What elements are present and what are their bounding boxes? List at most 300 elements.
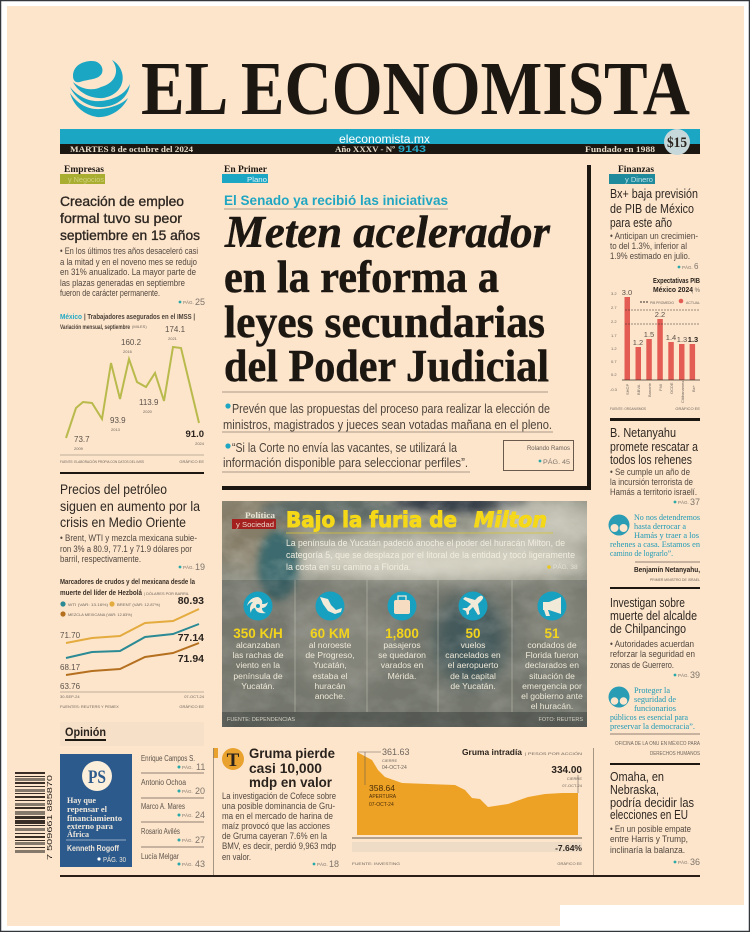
bar chart: expectativas PIB: FUENTE: ORGANISMOS [610, 406, 646, 411]
line chart: trabajadores asegurados: 2009 [74, 446, 84, 451]
page ref [674, 857, 700, 867]
area chart: Gruma intradía: 07-OCT-24 [369, 802, 394, 808]
opinión heading: Opinión [65, 727, 106, 739]
line chart: trabajadores asegurados: Variación mensual, septiembre [60, 324, 130, 331]
story: Omaha [610, 770, 700, 867]
stat: pasajeros: pasajeros [383, 640, 421, 650]
area chart: Gruma intradía [352, 747, 583, 866]
date bar: 9143 [398, 144, 426, 154]
byline box [504, 440, 574, 470]
headline: siguen en aumento por la [60, 498, 200, 514]
panel title [286, 508, 553, 533]
stat: distancia: Yucatán, [313, 660, 347, 670]
stat: condados: 51 [544, 626, 560, 641]
body: 1.9% estimado en julio. [610, 251, 690, 261]
bar chart: expectativas PIB: | % [691, 288, 701, 294]
columnist list: PÁG. [182, 812, 193, 818]
headline [610, 426, 698, 467]
headline: promete rescatar a [610, 440, 698, 454]
pull quote [608, 512, 701, 558]
bar chart: expectativas PIB: 2.2 [655, 310, 665, 319]
page ref: PÁG. [317, 861, 328, 867]
page ref: PÁG. [678, 499, 689, 505]
featured column: Hay que [67, 796, 96, 805]
pull quote: Proteger la [634, 685, 670, 695]
bar chart: expectativas PIB: SHCP [625, 384, 630, 395]
columnist list: Rosario Avilés [141, 827, 180, 836]
lead bullets: “Si la Corte no envía las vacantes, se utilizará la [232, 441, 457, 455]
page ref: PÁG. [678, 859, 689, 865]
bar chart: expectativas PIB: 2.7 [611, 305, 617, 310]
columnist list: 27 [195, 835, 205, 845]
line chart: trabajadores asegurados: GRÁFICO EE [179, 459, 204, 464]
stat: distancia [305, 592, 355, 701]
bar chart: expectativas PIB: BBVA [636, 384, 641, 395]
line chart: trabajadores asegurados: 91.0 [186, 429, 204, 440]
featured column: Kenneth Rogoff [67, 844, 119, 853]
date bar: Año XXXV - Nº [335, 144, 395, 154]
body text [60, 246, 198, 298]
quote attribution [634, 567, 701, 582]
lead bullets: información disponible para seleccionar perfiles”. [223, 456, 468, 470]
stat: distancia: anoche. [315, 691, 345, 701]
columnist list: 11 [196, 762, 205, 772]
bar chart: expectativas PIB: 1.3 [688, 335, 698, 344]
Gruma body: La investigación de Cofece sobre [222, 791, 336, 801]
bar chart: expectativas PIB: PIB PROMEDIO [650, 300, 674, 305]
stat: viento [232, 592, 284, 691]
area chart: Gruma intradía: 334.00 [551, 765, 582, 776]
body text: a la mitad y en el noveno mes se redujo [60, 257, 197, 267]
pull quote: No nos detendremos [634, 512, 700, 522]
section tag: Empresas y Negocios [60, 164, 105, 184]
stat: viento: las rachas de [232, 650, 284, 660]
line chart: crudos: 71.70 [60, 631, 81, 640]
barcode: 7 509661 885870 [45, 775, 54, 860]
headline [610, 596, 697, 636]
body: • En un posible empate [610, 824, 691, 834]
panel intro [286, 538, 578, 573]
area chart: Gruma intradía: CIERRE [382, 758, 397, 763]
Gruma headline: mdp en valor [249, 774, 333, 790]
body text: las plazas generadas en septiembre [60, 278, 185, 288]
line chart: trabajadores asegurados: (MILES) [132, 324, 147, 329]
quote attribution [615, 740, 701, 757]
featured column: financiamiento [67, 814, 122, 823]
stat: vuelos [445, 592, 501, 691]
panel title: Bajo la furia de [286, 508, 457, 532]
line chart: crudos: 30-SEP-24 [60, 694, 80, 699]
pull quote [608, 685, 695, 731]
columnist list: PÁG. [182, 788, 193, 794]
byline box: Rolando Ramos [527, 446, 570, 452]
line chart: crudos: muerte del líder de Hezbolá [60, 590, 142, 597]
orange marker [213, 748, 218, 758]
body [610, 467, 697, 497]
icon: quote tree [608, 686, 630, 708]
bar chart: expectativas PIB: 2.2 [611, 319, 617, 324]
line chart: crudos: 63.76 [60, 682, 81, 691]
columnist list: Antonio Ochoa [141, 778, 186, 787]
stat: viento: viento en la [236, 660, 280, 670]
area chart: Gruma intradía: -7.64% [555, 843, 582, 853]
area chart: Gruma intradía: Gruma intradía [462, 748, 523, 757]
pull quote: públicos es esencial para [610, 712, 688, 722]
panel: opinión [60, 722, 205, 869]
headline: septiembre en 15 años [60, 227, 200, 243]
Gruma headline: Gruma pierde [249, 745, 335, 761]
bar chart: expectativas PIB: 1.5 [644, 330, 654, 339]
satellite background [222, 501, 587, 727]
body text: ron 3% a 80.9, 77.1 y 71.9 dólares por [60, 544, 192, 554]
line chart: trabajadores asegurados: 2021 [168, 336, 178, 341]
quote attribution: Benjamín Netanyahu, [634, 567, 700, 574]
body [610, 824, 691, 855]
Gruma body: ma en el mercado de harina de [222, 811, 333, 821]
body: to del 1.3%, inferior al [610, 241, 687, 251]
stat: distancia: de Progreso, [305, 650, 355, 660]
columnist list [141, 754, 205, 869]
featured column: PÁG. 30 [103, 855, 126, 864]
headline: Investigan sobre [610, 596, 685, 610]
bar chart: expectativas PIB: 1.4 [666, 333, 676, 342]
stat: pasajeros: Mérida. [388, 671, 416, 681]
icon: quote [608, 514, 630, 536]
body: la incursión terrorista de [610, 477, 693, 487]
area chart: Gruma intradía: APERTURA [369, 794, 397, 800]
body: reforzar la seguridad en [610, 649, 695, 659]
stat: viento: alcanzaban [236, 640, 280, 650]
story: Bx+ [610, 187, 699, 271]
main headline [224, 207, 550, 391]
line chart: crudos: 68.17 [60, 663, 81, 672]
body [610, 639, 695, 670]
Gruma body: una posible dominancia de Gru- [222, 801, 335, 811]
page ref: PÁG. [183, 564, 194, 570]
panel credits: FUENTE: DEPENDENCIAS [227, 717, 295, 723]
body: Hamás a territorio israelí. [610, 487, 697, 497]
bar chart: expectativas PIB: 1.2 [633, 338, 643, 347]
date bar: $15 [667, 135, 687, 151]
body text: • Brent, WTI y mezcla mexicana subie- [60, 533, 197, 543]
body [610, 231, 698, 261]
panel: Gruma [213, 745, 583, 869]
line chart: trabajadores asegurados: 2020 [143, 409, 153, 414]
body: • Autoridades acuerdan [610, 639, 694, 649]
byline box: PÁG. 45 [543, 457, 570, 466]
headline [60, 481, 200, 530]
date bar [60, 129, 700, 155]
page ref: PÁG. [183, 299, 194, 305]
Gruma body: maíz provocó que las acciones [222, 821, 330, 831]
stat: viento: Yucatán. [241, 681, 275, 691]
section tag: Empresas y Negocios: Empresas [64, 164, 105, 174]
line chart: crudos: Marcadores de crudos y del mexicana desde la [60, 579, 195, 586]
main headline: Meten acelerador [224, 207, 550, 257]
bar chart: expectativas PIB [610, 278, 701, 411]
page ref: 19 [195, 562, 205, 572]
bar chart: expectativas PIB: Expectativas PIB [653, 278, 700, 285]
stat: condados: condados de [527, 640, 577, 650]
section tag: Finanzas y Dinero: Finanzas [618, 164, 655, 174]
opinión heading [60, 722, 204, 746]
date bar: Fundado en 1988 [585, 144, 655, 154]
featured column: África [67, 829, 89, 839]
main headline: leyes secundarias [224, 297, 545, 347]
body: • Anticipan un crecimien- [610, 231, 698, 241]
stat: condados: el gobierno ante [521, 691, 583, 701]
story: Netanyahu [608, 426, 701, 582]
body: entre Harris y Trump, [610, 834, 688, 844]
headline: Omaha, en [610, 770, 664, 784]
Gruma icon [222, 748, 244, 771]
stat: pasajeros: 1,800 [385, 626, 419, 641]
headline: podría decidir las [610, 796, 694, 810]
bar chart: expectativas PIB: México 2024 [653, 287, 693, 294]
area chart: Gruma intradía: 358.64 [369, 783, 395, 793]
story: Chilpancingo [608, 596, 701, 757]
headline: Nebraska, [610, 783, 659, 797]
section tag [232, 510, 276, 529]
page ref: 6 [694, 262, 699, 271]
headline [60, 193, 200, 243]
pull quote: rehenes a casa. Estamos en [610, 539, 701, 549]
stat: viento: península de [233, 671, 283, 681]
page ref: 25 [195, 297, 205, 307]
panel credits [227, 717, 583, 723]
icon: megaphone [538, 592, 566, 620]
body: inclinaría la balanza. [610, 845, 685, 855]
line chart: crudos: WTI (VAR: 13.16%) [68, 602, 109, 607]
bar chart: expectativas PIB: 3.2 [611, 291, 617, 296]
line chart: trabajadores asegurados: 2013 [111, 427, 121, 432]
page ref [674, 497, 700, 507]
bar chart: expectativas PIB: Bx+ [691, 384, 696, 392]
Gruma headline [249, 745, 335, 790]
headline: todos los rehenes [610, 453, 692, 467]
panel intro: La península de Yucatán padeció anoche el poder del huracán Milton, de [286, 538, 565, 549]
section tag: En Primer Plano: En Primer [224, 164, 267, 174]
bar chart: expectativas PIB: Banorte [647, 382, 652, 397]
page ref: 36 [690, 857, 700, 867]
stat: condados: Florida fueron [525, 650, 579, 660]
page ref: 39 [690, 670, 700, 680]
bar chart: expectativas PIB: FMI [658, 384, 663, 391]
page ref [179, 297, 205, 307]
page ref: 37 [690, 497, 700, 507]
line chart: trabajadores asegurados: FUENTE: ELABORACIÓN PROPIA CON DATOS DEL IMSS [60, 459, 144, 464]
line chart: crudos: 80.93 [178, 595, 204, 607]
section tag: Política [245, 510, 276, 520]
main headline: en la reforma a [224, 252, 499, 302]
panel title: Milton [474, 508, 547, 532]
panel credits: FOTO: REUTERS [538, 717, 583, 723]
lead bullets [222, 402, 553, 472]
pull quote: funcionarios [634, 703, 676, 713]
section tag: Finanzas y Dinero: y Dinero [625, 175, 653, 184]
page ref: 18 [329, 859, 339, 869]
line chart: crudos: MEZCLA MEXICANA (VAR: 12.83%) [68, 612, 133, 617]
bar chart: expectativas PIB: 3.0 [622, 288, 632, 297]
stat: vuelos: el aeropuerto [448, 660, 499, 670]
Gruma body: de Gruma cayeran 7.6% en la [222, 831, 327, 841]
barcode [15, 772, 54, 860]
date bar: eleconomista.mx [339, 132, 430, 146]
line chart: trabajadores asegurados: 160.2 [121, 338, 142, 347]
columnist list: 24 [195, 810, 205, 820]
story: empleo formal [60, 193, 205, 307]
area chart: Gruma intradía: FUENTE: INVESTING [352, 861, 400, 866]
pull quote: Hamás y traer a los [634, 530, 699, 540]
section tag: Empresas y Negocios: y Negocios [68, 175, 104, 184]
page ref: PÁG. [682, 264, 693, 270]
columnist list: PÁG. [182, 837, 193, 843]
body text: barril, respectivamente. [60, 554, 141, 564]
bar chart: expectativas PIB: 1.2 [611, 346, 617, 351]
headline: de PIB de México [610, 202, 694, 216]
masthead logo [70, 60, 130, 117]
bar chart: expectativas PIB: 1.7 [611, 333, 617, 338]
section tag: Finanzas y Dinero [609, 164, 655, 184]
line chart: trabajadores asegurados: | Trabajadores asegurados en el IMSS | [84, 314, 195, 321]
page ref [674, 670, 700, 680]
kicker: El Senado ya recibió las iniciativas [224, 193, 448, 208]
stat: condados: declarados en [525, 660, 579, 670]
icon: Mexico map [316, 592, 344, 620]
columnist list: 43 [195, 859, 205, 869]
bar chart: expectativas PIB: 0.7 [611, 359, 617, 364]
line chart: trabajadores asegurados: 174.1 [165, 325, 186, 334]
area chart: Gruma intradía: 361.63 [382, 747, 410, 757]
line chart: trabajadores asegurados: 2016 [123, 349, 133, 354]
line chart: trabajadores asegurados: 2024 [195, 441, 205, 446]
stat: distancia: al noroeste [309, 640, 351, 650]
stat: distancia: estaba el [313, 671, 348, 681]
stat: vuelos: cancelados en [445, 650, 501, 660]
headline: Creación de empleo [60, 193, 184, 209]
Gruma body: en valor. [222, 852, 251, 862]
icon: suitcase [388, 592, 416, 620]
headline: para este año [610, 216, 672, 230]
columnist list: PÁG. [182, 764, 193, 770]
bar chart: expectativas PIB: ACTUAL [686, 300, 701, 305]
line chart: trabajadores asegurados: 113.9 [139, 398, 159, 407]
line chart: crudos: | DÓLARES POR BARRIL [144, 591, 190, 596]
page ref [313, 859, 339, 869]
story: petróleo [60, 481, 205, 572]
stat: vuelos: vuelos [461, 640, 485, 650]
line chart: crudos: FUENTES: REUTERS Y PEMEX [60, 704, 119, 709]
section tag: En Primer Plano [222, 164, 268, 184]
stat: vuelos: 50 [465, 626, 481, 641]
line chart: trabajadores asegurados: 93.9 [110, 416, 126, 425]
stat: distancia: 60 KM [310, 626, 350, 641]
headline: B. Netanyahu [610, 426, 676, 440]
stat: pasajeros [378, 592, 426, 681]
stat: viento: 350 K/H [233, 626, 283, 641]
line chart: crudos [60, 579, 205, 709]
lead bullets: Prevén que las propuestas del proceso para realizar la elección de [232, 402, 550, 416]
area chart: Gruma intradía: GRÁFICO EE [557, 861, 582, 866]
page ref [678, 262, 699, 271]
lead bullets: ministros, magistrados y jueces sean votadas mañana en el pleno. [223, 418, 552, 432]
featured column [60, 754, 132, 867]
page ref: PÁG. [678, 672, 689, 678]
section tag: En Primer Plano: Plano [247, 175, 267, 184]
pull quote: seguridad de [634, 694, 676, 704]
body text: • En los últimos tres años desaceleró casi [60, 246, 198, 256]
line chart: trabajadores asegurados: 73.7 [74, 435, 90, 444]
pull quote: camino de lograrlo”. [610, 548, 673, 558]
stat: pasajeros: varados en [381, 660, 423, 670]
pull quote: hasta derrocar a [634, 521, 686, 531]
bar chart: expectativas PIB: -0.3 [610, 387, 618, 392]
bar chart: expectativas PIB: GRÁFICO EE [675, 406, 700, 411]
panel intro: categoría 5, que se desplaza por el litoral de la entidad y tocó ligeramente [286, 550, 575, 561]
body: zonas de Guerrero. [610, 660, 674, 670]
Gruma body [222, 791, 336, 862]
stat: vuelos: de la capital [450, 671, 496, 681]
stat: condados [521, 592, 583, 711]
line chart: trabajadores asegurados: México [60, 314, 82, 321]
headline: de Chilpancingo [610, 622, 686, 636]
body text: en 31% anualizado. La mayor parte de [60, 267, 196, 277]
stat: pasajeros: se quedaron [378, 650, 426, 660]
area chart: Gruma intradía: 07-OCT-24 [562, 783, 583, 788]
Gruma icon: T [227, 750, 240, 771]
line chart: crudos: GRÁFICO EE [179, 704, 204, 709]
stat: condados: situación de [529, 671, 575, 681]
columnist list: 20 [195, 786, 205, 796]
body text [60, 533, 197, 564]
featured column: externo para [67, 822, 113, 831]
line chart: crudos: 07-OCT-24 [184, 694, 205, 699]
panel: hurricane Milton [222, 501, 587, 727]
body text: fueron de carácter permanente. [60, 288, 160, 298]
featured column: PS [88, 767, 106, 788]
black column frame [222, 165, 591, 490]
section tag: y Sociedad [236, 520, 274, 529]
stat: condados: emergencia por [522, 681, 582, 691]
line chart: crudos: 77.14 [178, 632, 204, 644]
columnist list: Lucía Melgar [141, 852, 179, 861]
headline [610, 187, 698, 230]
line chart: trabajadores asegurados [60, 314, 205, 464]
stat: distancia: huracán [314, 681, 346, 691]
bar chart: expectativas PIB: Citibanamex [680, 381, 685, 403]
headline: Precios del petróleo [60, 481, 167, 497]
area chart: Gruma intradía: | PESOS POR ACCIÓN [525, 751, 582, 756]
main headline: del Poder Judicial [224, 341, 549, 391]
Gruma body: BMV, es decir, perdió 9,963 mdp [222, 841, 336, 851]
icon: airplane [458, 592, 488, 620]
columnist list: PÁG. [182, 861, 193, 867]
page ref [179, 562, 205, 572]
quote attribution: DERECHOS HUMANOS [650, 751, 701, 757]
body: • Se cumple un año de [610, 467, 690, 477]
featured column: repensar el [67, 805, 108, 814]
stat: condados: el huracán. [531, 701, 573, 711]
line chart: crudos: BRENT (VAR: 12.87%) [117, 602, 161, 607]
line chart: crudos: 71.94 [178, 653, 204, 665]
date bar: MARTES 8 de octubre del 2024 [70, 144, 194, 154]
pull quote: preservar la democracia”. [610, 721, 695, 731]
area chart: Gruma intradía: CIERRE [567, 776, 582, 781]
Gruma headline: casi 10,000 [249, 760, 322, 776]
headline: muerte del alcalde [610, 609, 697, 623]
headline: formal tuvo su peor [60, 210, 182, 226]
columnist list: Marco A. Mares [141, 802, 185, 811]
